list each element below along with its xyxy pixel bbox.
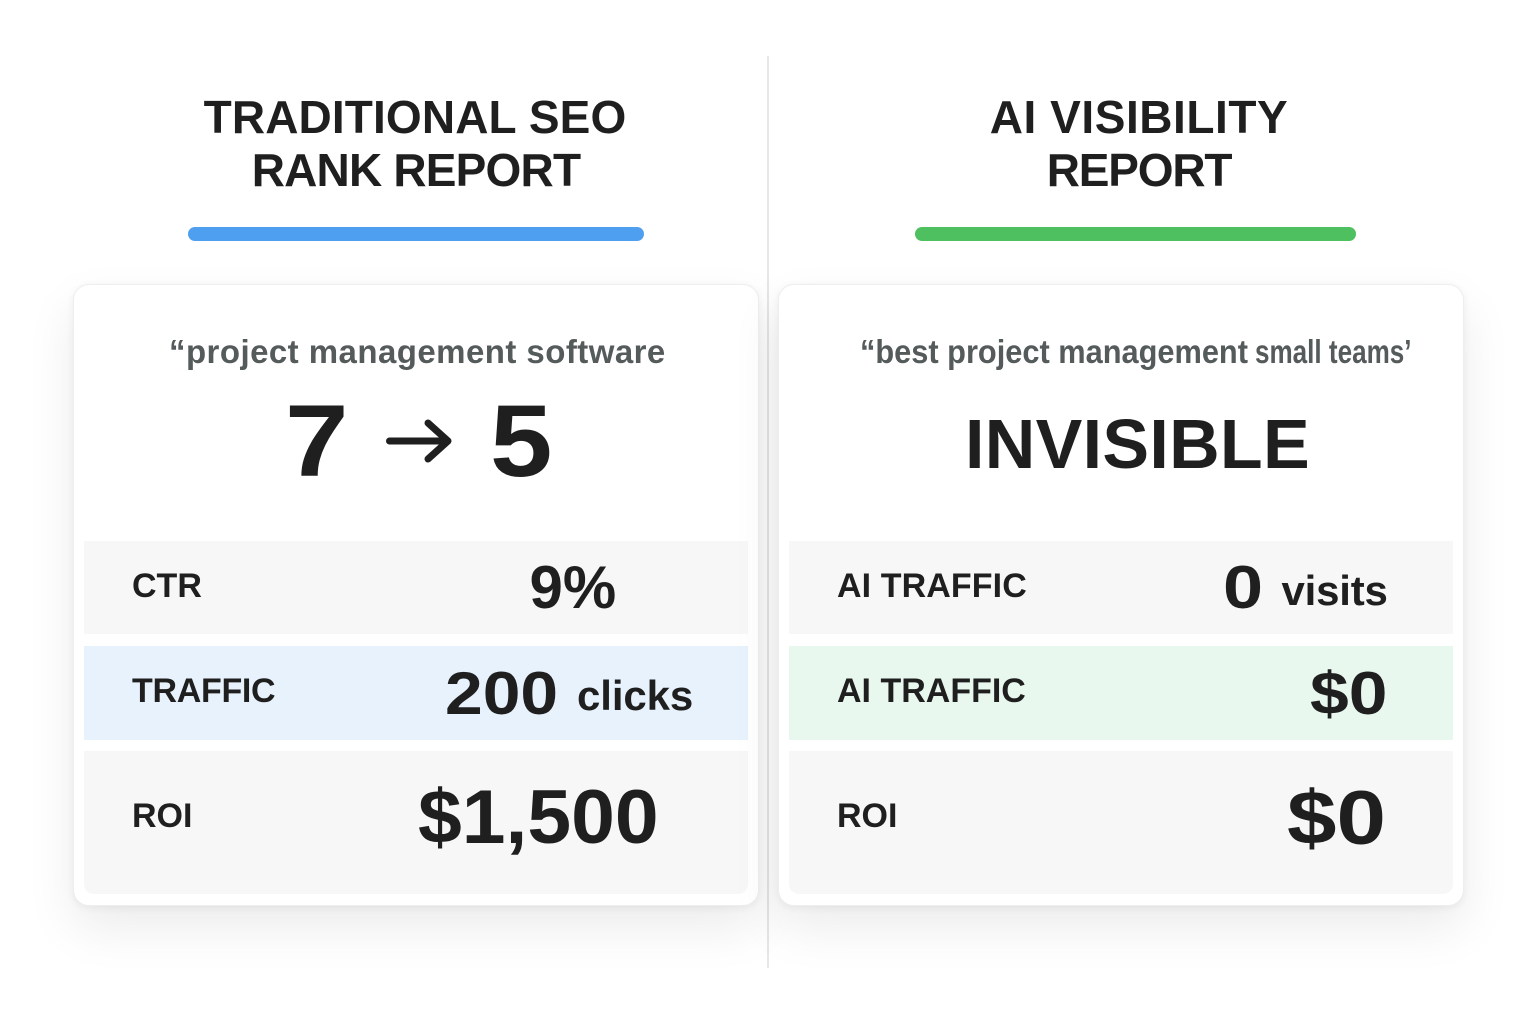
row: traffic — [84, 646, 748, 740]
row: ROI — [84, 751, 748, 894]
invisible status: INVISIBLE — [965, 405, 1310, 483]
label: TRAFFIC — [132, 672, 275, 710]
query end: small teams’ — [1255, 333, 1412, 370]
green accent bar — [915, 227, 1356, 241]
value: $0 — [1287, 776, 1386, 861]
center divider — [767, 56, 769, 968]
value: $1,500 — [418, 775, 658, 860]
query text — [860, 333, 1412, 370]
arrow — [386, 420, 452, 462]
heading: traditional SEO: RANK REPORT — [252, 144, 580, 196]
row: AI traffic visits — [789, 541, 1453, 634]
panel: AI visibility card — [778, 284, 1464, 906]
heading: AI visibility: REPORT — [1047, 144, 1231, 196]
value: $0 — [1310, 660, 1387, 727]
label: ROI — [837, 797, 897, 835]
row: AI traffic revenue — [789, 646, 1453, 740]
value: 9% — [530, 554, 616, 621]
row: ROI — [789, 751, 1453, 894]
label: ROI — [132, 797, 192, 835]
rank change — [285, 384, 552, 498]
panel: traditional SEO card — [73, 284, 759, 906]
query text: “project management software — [169, 333, 666, 370]
blue accent bar — [188, 227, 644, 241]
value: 0 — [1222, 554, 1263, 621]
rank to: 5 — [490, 384, 552, 498]
row: CTR — [84, 541, 748, 634]
label: AI TRAFFIC — [837, 672, 1026, 710]
query start: “best project management — [860, 333, 1248, 370]
rank from: 7 — [285, 384, 349, 498]
value: 200 — [444, 660, 558, 727]
label: CTR — [132, 567, 202, 605]
label: AI TRAFFIC — [837, 567, 1027, 605]
heading: AI visibility: AI VISIBILITY — [990, 91, 1288, 143]
heading: traditional SEO — [204, 91, 626, 196]
unit: clicks — [577, 672, 693, 719]
heading: AI visibility — [990, 91, 1288, 196]
unit: visits — [1282, 567, 1388, 614]
heading: traditional SEO: TRADITIONAL SEO — [204, 91, 626, 143]
